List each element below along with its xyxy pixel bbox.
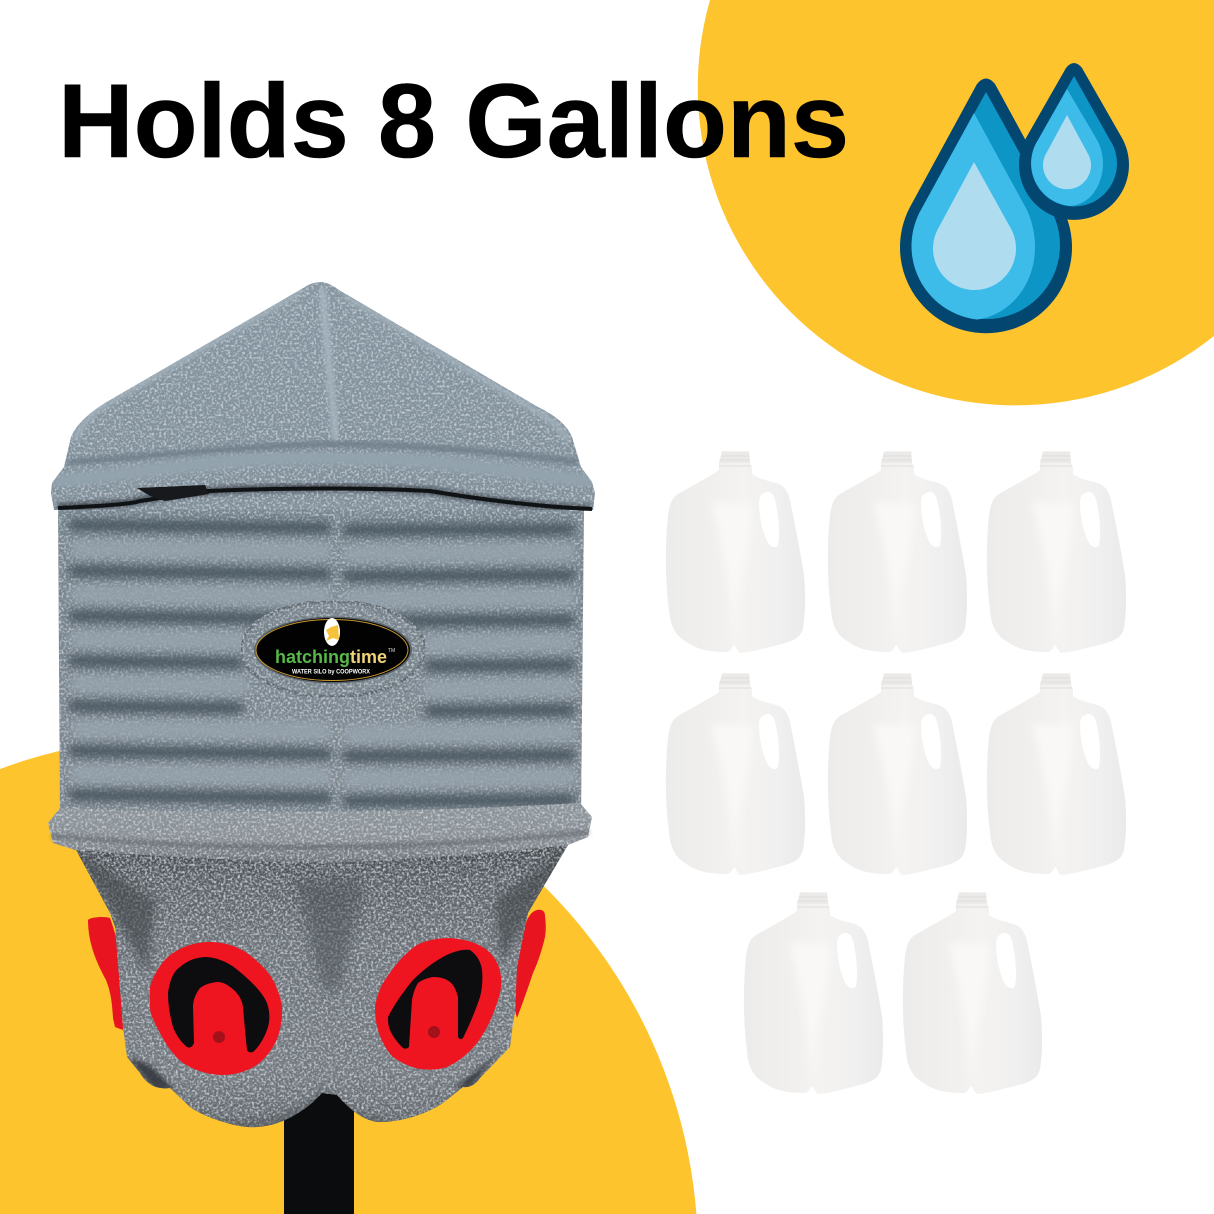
jug 4 [666,673,805,875]
yellow circle bottom left [0,737,696,1214]
jug 8 [903,892,1042,1094]
left side red drinker [88,917,123,1030]
jug 2 [828,451,967,653]
right side red drinker [512,910,546,1018]
brand name: hatchingtime [275,646,387,667]
chick icon [324,618,340,646]
icon: water drops [900,63,1129,333]
water silo product [48,282,595,1214]
yellow circle top right [698,0,1214,405]
jug 6 [987,673,1126,875]
lid latch [137,485,209,501]
left red drinker cup [150,942,282,1075]
product line: WATER SILO by COOPWORX [292,668,371,676]
right red drinker cup [375,938,501,1070]
jug 1 [666,451,805,653]
corrugated tank body [58,505,584,815]
roof lid [51,282,595,510]
lower tank rim [48,803,592,863]
gallon jugs grid [666,451,1126,1094]
logo ring [241,601,425,697]
jug 7 [744,892,883,1094]
trademark: TM [388,648,395,654]
post [284,1085,354,1214]
lid seam [58,488,592,509]
jug 5 [828,673,967,875]
title: Holds 8 Gallons [58,63,849,180]
small drop [1019,63,1129,220]
funnel base [75,845,568,1140]
logo badge [241,601,425,697]
logo oval [254,616,412,684]
jug 3 [987,451,1126,653]
large drop [900,78,1072,333]
